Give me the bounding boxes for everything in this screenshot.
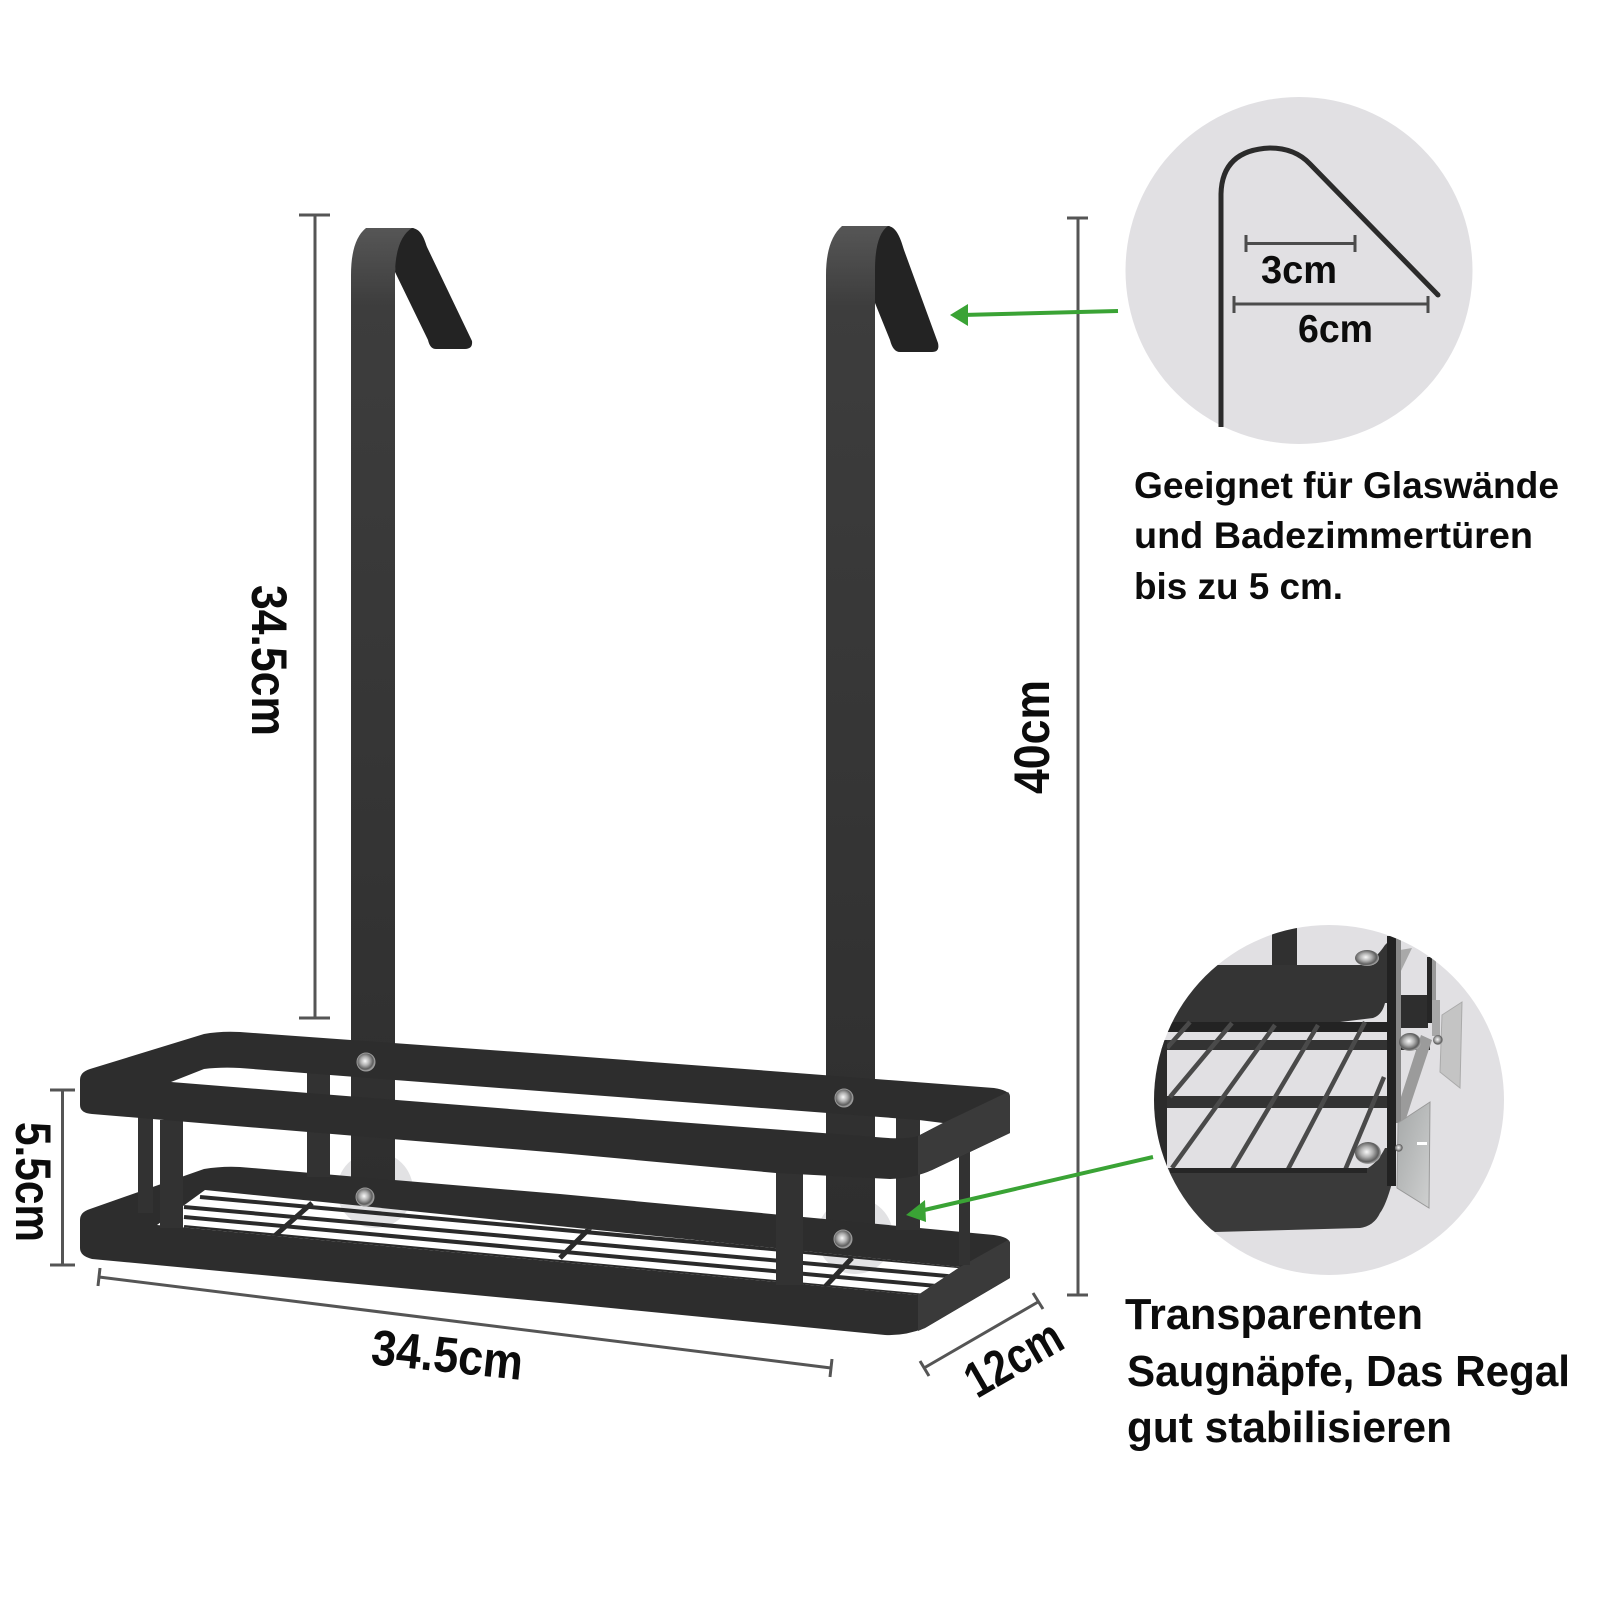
dimension: basket height 5.5cm bbox=[5, 1090, 75, 1265]
left hook bbox=[351, 228, 472, 1200]
shadow strip bbox=[1150, 1022, 1388, 1032]
upper band bbox=[1172, 943, 1387, 1022]
dimension: hook height 34.5cm: 34.5cm bbox=[241, 585, 297, 736]
dimension: total height 40cm: 40cm bbox=[1004, 680, 1060, 794]
screws bbox=[356, 1053, 853, 1248]
cross wires bbox=[1167, 1022, 1384, 1175]
upright post bbox=[1272, 928, 1297, 965]
arrow: to hook bbox=[950, 304, 1118, 326]
top rail side highlight bbox=[918, 1092, 1010, 1175]
bolts bbox=[1355, 950, 1443, 1164]
panel: suction cup detail circle bbox=[1150, 920, 1504, 1275]
text: hook caption bbox=[1134, 465, 1559, 607]
suction cups behind rack bbox=[337, 1152, 893, 1274]
text: suction cup caption: Transparenten bbox=[1125, 1290, 1423, 1339]
panel: hook detail circle bbox=[1126, 97, 1472, 444]
suction cup two bbox=[1397, 1102, 1430, 1208]
text: hook caption: Geeignet für Glaswände bbox=[1134, 465, 1559, 506]
dimension 3cm bbox=[1246, 235, 1355, 292]
mesh top strip bbox=[1170, 1168, 1367, 1173]
horizontal wires bbox=[1160, 1040, 1430, 1108]
dimension: depth 12cm: 12cm bbox=[954, 1308, 1073, 1409]
bottom tray bbox=[80, 1167, 1010, 1335]
dimension 6cm bbox=[1234, 296, 1428, 351]
far flange bbox=[1432, 1000, 1440, 1036]
posts bbox=[138, 1073, 970, 1285]
tray side highlight bbox=[918, 1240, 1010, 1331]
dimension: width 34.5cm bbox=[98, 1268, 832, 1391]
dimension: width 34.5cm: 34.5cm bbox=[369, 1319, 526, 1391]
dimension: basket height 5.5cm: 5.5cm bbox=[5, 1122, 61, 1242]
shelf rack bbox=[80, 226, 1010, 1335]
arrow: to suction cup bbox=[906, 1157, 1153, 1222]
dimension: total height 40cm bbox=[1004, 218, 1088, 1295]
right hook bbox=[826, 226, 938, 1230]
dimension 6cm: 6cm bbox=[1298, 308, 1373, 351]
close-up of basket corner bbox=[1150, 920, 1462, 1232]
text: suction cup caption: gut stabilisieren bbox=[1127, 1403, 1452, 1452]
text: suction cup caption bbox=[1125, 1290, 1570, 1452]
hook profile bbox=[1221, 148, 1438, 427]
floor wires bbox=[184, 1197, 980, 1301]
top bracket bbox=[1401, 948, 1412, 970]
suction reflection bbox=[1417, 1142, 1427, 1145]
far plate bbox=[1427, 957, 1436, 1023]
lower band bbox=[1150, 1148, 1392, 1232]
suction cup one bbox=[1440, 1002, 1462, 1088]
text: suction cup caption: Saugnäpfe, Das Regal bbox=[1127, 1347, 1570, 1396]
dimension 3cm: 3cm bbox=[1261, 249, 1337, 292]
far dark block bbox=[1400, 995, 1428, 1028]
dimension: hook height 34.5cm bbox=[241, 215, 330, 1018]
left band bbox=[1154, 1040, 1167, 1166]
text: hook caption: und Badezimmertüren bbox=[1134, 515, 1533, 556]
dimension: depth 12cm bbox=[920, 1293, 1073, 1409]
grey bracket bbox=[1401, 1035, 1432, 1120]
top rail bbox=[80, 1032, 1010, 1179]
hook tip bbox=[1436, 292, 1440, 298]
vertical plate bbox=[1387, 936, 1401, 1186]
text: hook caption: bis zu 5 cm. bbox=[1134, 566, 1343, 607]
